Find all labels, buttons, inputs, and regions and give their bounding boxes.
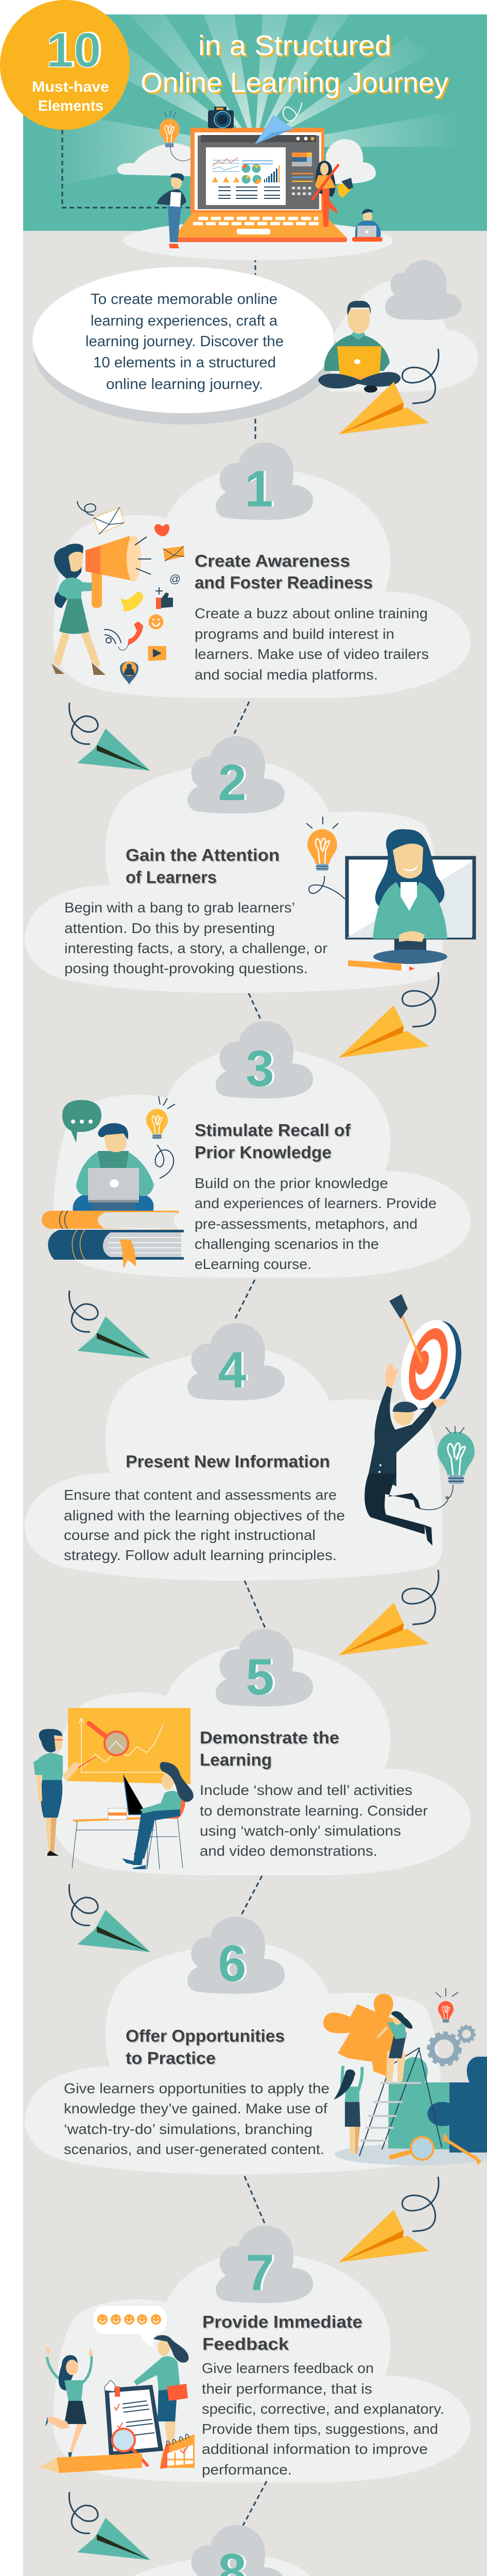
intro text: online learning journey. <box>106 376 263 393</box>
number: 3 <box>246 1040 274 1097</box>
plane: teal, steps 5-6 <box>69 1884 150 1952</box>
illustration: presenter on screen <box>347 829 474 971</box>
body text: and experiences of learners. Provide <box>195 1195 437 1211</box>
connector <box>245 1581 266 1629</box>
body text: Include ‘show and tell’ activities <box>200 1782 412 1798</box>
connector <box>240 1876 262 1918</box>
cloud <box>24 2555 444 2576</box>
body text: and social media platforms. <box>195 667 378 683</box>
illustration: learner on books <box>42 1096 184 1269</box>
step 2 <box>25 702 474 993</box>
cloud <box>53 1047 471 1278</box>
background clouds <box>329 260 478 392</box>
heading <box>202 2313 362 2354</box>
illustration: clipboard checklist <box>105 2380 163 2465</box>
body text: attention. Do this by presenting <box>64 920 275 936</box>
plane: teal, steps 1-2 <box>69 703 150 771</box>
icon: light bulb <box>306 817 345 899</box>
illustration: puzzle pieces <box>323 1994 487 2165</box>
heading <box>195 1121 351 1162</box>
number cloud <box>216 443 313 520</box>
illustration: jumping man with target <box>364 1294 471 1546</box>
intro text: learning journey. Discover the <box>85 333 284 350</box>
title: in a Structured <box>198 29 391 61</box>
intro bubble <box>32 267 337 425</box>
number: 2 <box>218 754 247 811</box>
heading: Prior Knowledge <box>195 1143 332 1162</box>
hero illustration: camera <box>208 107 234 128</box>
intro text: To create memorable online <box>91 291 277 308</box>
step 7 <box>39 2176 471 2482</box>
heading: of Learners <box>126 868 217 887</box>
heading: Demonstrate the <box>200 1728 339 1748</box>
body text: Give learners feedback on <box>202 2360 374 2376</box>
heading <box>126 846 280 887</box>
body text: pre-assessments, metaphors, and <box>195 1216 418 1232</box>
plane: teal, steps 3-4 <box>69 1291 150 1359</box>
illustration: women and ladder <box>334 2011 442 2156</box>
number: 6 <box>218 1935 247 1992</box>
number cloud <box>216 2226 313 2303</box>
badge: 10 must-have elements <box>0 0 130 130</box>
plane: yellow, steps 6-7 <box>339 2177 439 2262</box>
connector <box>234 702 249 734</box>
social media icons <box>77 501 184 685</box>
icon: gears <box>428 2026 475 2065</box>
body text: Give learners opportunities to apply the <box>64 2080 329 2096</box>
social media icons: @ <box>169 572 181 585</box>
figure: student at desk <box>72 1762 194 1869</box>
body text: eLearning course. <box>195 1256 311 1272</box>
cloud <box>25 1942 443 2174</box>
hero illustration: paper plane and curl <box>255 103 302 144</box>
body text: Create a buzz about online training <box>195 605 428 621</box>
plane: yellow, steps 4-5 <box>339 1570 439 1655</box>
badge: 10 must-have elements: 10 <box>46 23 101 78</box>
heading: and Foster Readiness <box>195 573 373 592</box>
icon: teal light bulb <box>420 1426 475 1510</box>
cloud <box>53 2252 471 2482</box>
body text: course and pick the right instructional <box>64 1527 316 1543</box>
number cloud <box>216 1629 313 1706</box>
heading: Provide Immediate <box>202 2313 362 2332</box>
step 4 <box>25 1280 475 1581</box>
hero illustration: laptop <box>172 128 347 242</box>
header: teal banner with rays <box>23 14 487 231</box>
body text: Begin with a bang to grab learners’ <box>64 900 295 916</box>
heading: Feedback <box>202 2335 289 2354</box>
connector: badge to laptop <box>62 130 196 208</box>
connector: laptop to intro <box>254 242 256 275</box>
heading: Stimulate Recall of <box>195 1121 351 1140</box>
body text: using ‘watch-only’ simulations <box>200 1823 401 1839</box>
connector <box>245 2176 266 2226</box>
body text: Provide them tips, suggestions, and <box>202 2421 438 2437</box>
cloud <box>53 468 471 698</box>
connector <box>249 993 262 1021</box>
body text: their performance, that is <box>202 2381 372 2397</box>
icon: red light bulb <box>436 1988 458 2023</box>
hero: background clouds and ground <box>117 139 393 260</box>
heading: to Practice <box>126 2049 216 2068</box>
intro text: 10 elements in a structured <box>93 354 276 371</box>
body text: specific, corrective, and explanatory. <box>202 2401 444 2417</box>
number: 1 <box>245 460 273 517</box>
number cloud <box>187 1917 285 1994</box>
heading: Learning <box>200 1751 272 1770</box>
body text: programs and build interest in <box>195 626 394 642</box>
speech bubble with smiley ratings <box>93 2306 167 2347</box>
heading: Gain the Attention <box>126 846 280 865</box>
body text <box>64 900 327 976</box>
title: Online Learning Journey <box>141 66 448 98</box>
step 6 <box>25 1876 487 2174</box>
body text <box>64 2080 329 2157</box>
illustration: woman with megaphone <box>51 535 151 675</box>
badge: 10 must-have elements: Must-have <box>32 79 109 95</box>
yellow paper plane <box>339 349 439 434</box>
number cloud <box>187 736 285 814</box>
body text <box>195 1175 437 1272</box>
body text: and video demonstrations. <box>200 1843 377 1859</box>
number: 7 <box>246 2244 274 2301</box>
cloud <box>25 761 443 993</box>
connector <box>243 2481 267 2526</box>
body text: ‘watch-try-do’ simulations, branching <box>64 2121 312 2137</box>
body text: strategy. Follow adult learning principles. <box>64 1547 337 1563</box>
title <box>141 29 448 98</box>
hero figure: man with notepad <box>157 173 186 248</box>
figure: teacher <box>33 1729 80 1856</box>
figure: woman with folder <box>134 2335 188 2445</box>
plane: teal, steps 7-8 <box>69 2492 150 2560</box>
pencils and calendar <box>39 2434 195 2473</box>
body text <box>195 605 429 683</box>
heading <box>195 552 373 592</box>
step 1 <box>51 419 471 698</box>
step 3 <box>42 993 471 1278</box>
cloud <box>53 1645 471 1875</box>
heading: Offer Opportunities <box>126 2027 285 2046</box>
heading: Create Awareness <box>195 552 350 571</box>
body text: Build on the prior knowledge <box>195 1175 388 1191</box>
number cloud <box>187 1323 285 1400</box>
body text: additional information to improve <box>202 2441 428 2457</box>
connector <box>254 419 256 442</box>
figure: jumping woman <box>45 2347 93 2462</box>
hero icon: light bulb <box>159 111 190 161</box>
body text: interesting facts, a story, a challenge, or <box>64 940 327 956</box>
body text: performance. <box>202 2462 292 2478</box>
number cloud <box>187 2525 285 2576</box>
illustration: yellow chart board <box>68 1708 190 1784</box>
intro section <box>32 260 478 434</box>
number: 5 <box>246 1648 274 1705</box>
connector <box>234 1280 255 1320</box>
body text <box>200 1782 428 1859</box>
body text <box>202 2360 444 2478</box>
number cloud <box>216 1021 313 1098</box>
hero figure: woman with pen <box>312 161 353 227</box>
step 5 <box>33 1581 471 1875</box>
heading <box>126 2027 285 2068</box>
body text: Ensure that content and assessments are <box>64 1487 337 1503</box>
plane: yellow, steps 2-3 <box>339 972 439 1058</box>
intro text: learning experiences, craft a <box>91 313 278 329</box>
number: 4 <box>218 1341 247 1398</box>
badge: 10 must-have elements: Elements <box>38 98 103 114</box>
heading: Present New Information <box>126 1452 330 1471</box>
body text <box>64 1487 345 1563</box>
body text: challenging scenarios in the <box>195 1236 379 1252</box>
cloud <box>25 1349 443 1581</box>
body text: posing thought-provoking questions. <box>64 960 308 976</box>
body text: knowledge they’ve gained. Make use of <box>64 2100 327 2116</box>
figure: man with yellow laptop <box>318 301 401 393</box>
body text: learners. Make use of video trailers <box>195 646 429 662</box>
body text: to demonstrate learning. Consider <box>200 1803 428 1819</box>
tools: magnifier and wrench <box>391 2133 481 2165</box>
body text: scenarios, and user-generated content. <box>64 2141 324 2157</box>
hero figure: sitting learner <box>352 209 382 242</box>
heading <box>200 1728 339 1770</box>
body text: aligned with the learning objectives of the <box>64 1507 345 1523</box>
intro text <box>85 291 284 393</box>
step 8 <box>24 2481 483 2576</box>
